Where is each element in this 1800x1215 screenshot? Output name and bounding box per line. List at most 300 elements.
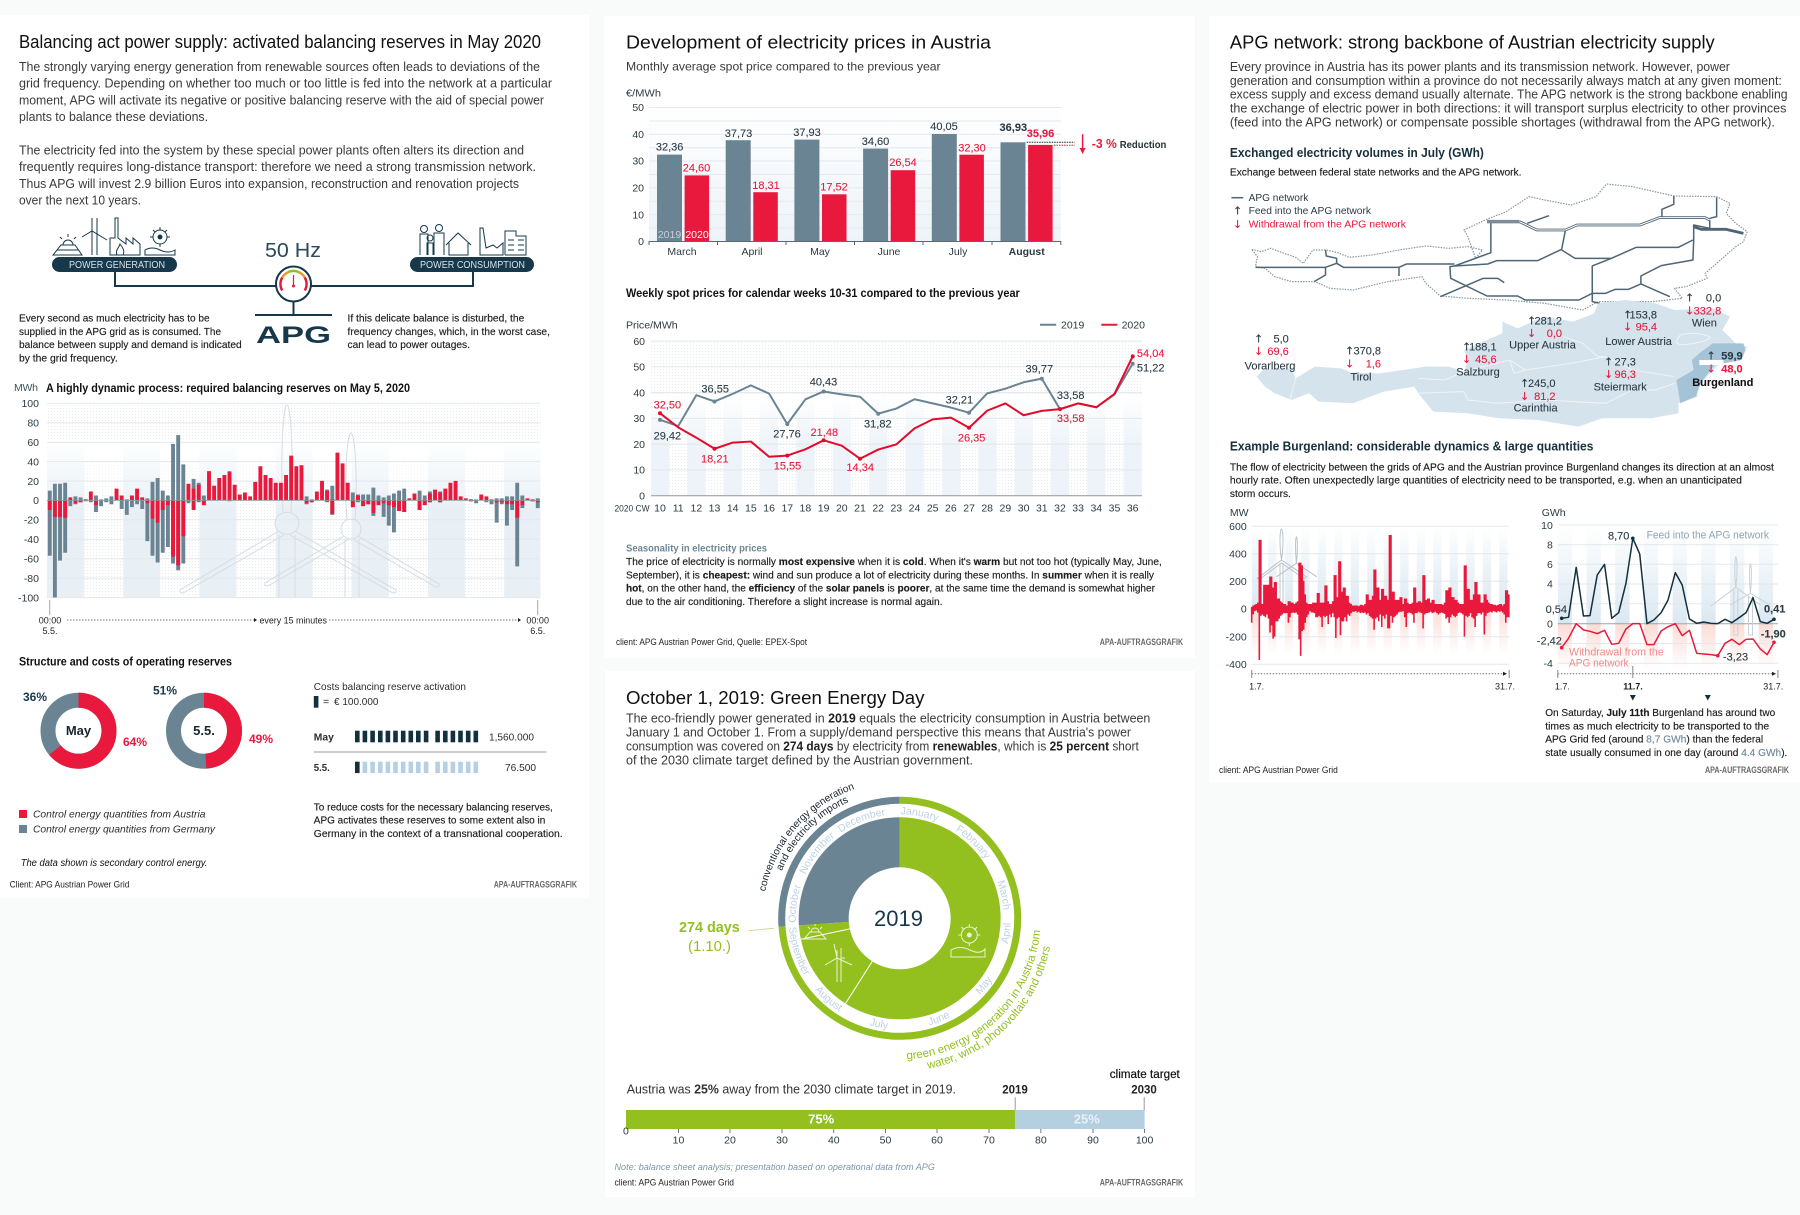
bar chart: monthly spot price: 2020 (685, 229, 709, 241)
y axis labels: -200 (1226, 631, 1247, 643)
data labels 2019: 29,42 (654, 430, 681, 442)
calendar week labels: 33 (1072, 503, 1084, 515)
month labels: September (789, 927, 810, 974)
value labels 2020: 24,60 (683, 162, 710, 174)
map label: Upper Austria: 0,0 (1547, 328, 1562, 340)
y axis labels: 60 (27, 437, 39, 449)
map label: Upper Austria: Upper Austria (1509, 339, 1577, 351)
intro text: (feed into the APG network) or compensate possible shortages (withdrawal from the APG network). (1230, 115, 1775, 129)
curved label: conventional: and electricity imports (778, 798, 848, 870)
map label: Steiermark: ↓ (1604, 368, 1613, 381)
data labels 2020 (654, 348, 1164, 474)
bar chart: climate target: 75% (808, 1112, 835, 1127)
time axis: every 15 minutes (260, 616, 327, 626)
time axis: 1.7. (1249, 682, 1264, 692)
map label: Lower Austria: ↓ (1623, 321, 1632, 334)
data labels (1537, 529, 1786, 669)
map label: Upper Austria: ↑ (1527, 314, 1536, 327)
legend: years (1040, 320, 1145, 332)
map label: Tirol: ↑ (1345, 345, 1354, 358)
month labels: March (667, 246, 697, 258)
intro text: generation and consumption within a province do not necessarily always match at any given moment: (1230, 74, 1782, 88)
note: secondary control energy: The data shown is secondary control energy. (21, 858, 207, 869)
y axis labels: 0 (1547, 618, 1553, 630)
map label: Salzburg: ↑ (1462, 340, 1471, 353)
text: seasonality (626, 543, 1162, 608)
calendar week labels: 30 (1018, 503, 1030, 515)
donut chart: May: May (66, 723, 92, 738)
turbine illustration (1257, 529, 1317, 610)
y axis labels: 30 (633, 413, 645, 425)
curved label: conventional: conventional energy generation (760, 784, 854, 891)
turbine illustration (1711, 557, 1770, 635)
map label: Tirol: ↓ (1345, 357, 1354, 370)
calendar week labels: 24 (909, 503, 920, 515)
intro text (626, 712, 1150, 767)
value labels 2019: 32,36 (656, 142, 683, 154)
map label: Salzburg: Salzburg (1456, 367, 1500, 379)
legend: network: ↓ (1233, 218, 1242, 231)
legend: control energy (19, 808, 216, 836)
map label: Tirol (1345, 345, 1381, 383)
APG logo: APG (256, 322, 331, 349)
heading: dynamic process: A highly dynamic process: required balancing reserves on May 5, 2020 (46, 381, 410, 395)
map label: Steiermark: ↑ (1604, 355, 1613, 368)
month labels: January (900, 807, 939, 822)
bar chart: climate target: 0 (623, 1126, 629, 1138)
intro text (1230, 60, 1788, 129)
y axis labels: 200 (1229, 576, 1247, 588)
heading: dynamic process: MWh (14, 382, 38, 394)
text: climate target gap: Austria was 25% away from the 2030 climate target in 2019. (627, 1082, 956, 1096)
map label: Vorarlberg: ↑ (1254, 332, 1263, 346)
icon: wind (825, 944, 852, 982)
y axis labels: 10 (1541, 520, 1553, 532)
data labels 2020: 26,35 (958, 432, 985, 444)
calendar week labels: 16 (763, 503, 775, 515)
month labels: August (814, 987, 842, 1012)
bar chart: climate target: climate target (1110, 1069, 1181, 1081)
frequency text: 50 Hz (265, 240, 321, 262)
legend: network: Withdrawal from the APG network (1249, 218, 1407, 230)
text: Burgenland intro (1230, 461, 1774, 500)
map label: Lower Austria: 153,8 (1629, 309, 1657, 321)
text: Burgenland intro: storm occurs. (1230, 488, 1291, 500)
bar chart: climate target: 100 (1136, 1134, 1154, 1146)
text: transnational cooperation: APG activates these reserves to some extent also in (314, 815, 545, 827)
bar chart: monthly spot price (632, 102, 1061, 258)
y axis labels: 10 (633, 465, 645, 477)
donut chart: 5.5. (153, 684, 273, 761)
label: power generation: POWER GENERATION (69, 260, 165, 271)
map label: Tirol: 1,6 (1366, 358, 1381, 370)
y axis labels: 400 (1229, 548, 1247, 560)
map label: Carinthia: ↓ (1520, 390, 1529, 403)
data labels 2020: 32,50 (654, 399, 681, 411)
footer: client: client: APG Austrian Power Grid (1219, 765, 1338, 775)
line chart: weekly prices (614, 336, 1164, 515)
data labels 2019: 36,55 (701, 384, 729, 396)
month labels: July (870, 1018, 888, 1030)
bar chart: climate target (623, 1069, 1181, 1146)
calendar week labels: 20 (836, 503, 848, 515)
y axis labels: 60 (633, 336, 645, 348)
axis unit: €/MWh (626, 88, 661, 100)
data labels 2020: 18,21 (701, 453, 729, 465)
value labels 2020: 32,30 (958, 142, 986, 154)
map label: Lower Austria: ↑ (1623, 308, 1632, 321)
heading: exchanged volumes: Exchanged electricity volumes in July (GWh) (1230, 145, 1484, 160)
data labels 2019: 31,82 (864, 418, 892, 430)
calendar week labels: 13 (709, 503, 720, 515)
month labels: October (788, 884, 800, 922)
data labels 2019: 40,43 (810, 377, 837, 389)
value labels 2019: 36,93 (1000, 122, 1027, 134)
map label: Vorarlberg: 69,6 (1267, 346, 1289, 358)
y axis labels: -400 (1226, 659, 1247, 671)
data labels: -2,42 (1537, 636, 1562, 648)
month labels: August (1009, 246, 1045, 258)
calendar week labels: 32 (1054, 503, 1066, 515)
text: seasonality: hot, on the other hand, the efficiency of the solar panels is poorer, at the same time the demand is somewhat higher (626, 583, 1155, 595)
y axis labels: -20 (24, 514, 39, 526)
map label: Upper Austria: 281,2 (1534, 315, 1562, 327)
callout: 274 days: 274 days (679, 919, 740, 936)
calendar week labels: 11 (673, 503, 684, 515)
month labels: June (928, 1013, 950, 1025)
calendar week labels: 23 (890, 503, 902, 515)
icon: power consumption (420, 224, 526, 255)
cost chart: balancing reserve activation: 76.500 (505, 762, 536, 774)
map label: Salzburg (1456, 340, 1500, 379)
month labels: April (1001, 923, 1012, 944)
intro text: Thus APG will invest 2.9 billion Euros into expansion, reconstruction and renovation projects (19, 177, 519, 191)
y axis labels: -60 (24, 553, 39, 565)
y axis labels: 20 (632, 182, 644, 194)
intro text: moment, APG will activate its negative or positive balancing reserve with the aid of special power (19, 93, 544, 107)
map label: Burgenland: Burgenland (1692, 377, 1753, 389)
text: seasonality: The price of electricity is normally most expensive when it is cold. When it's warm but not too hot (typically May, June, (626, 556, 1162, 568)
time axis: 6.5. (530, 626, 545, 636)
calendar week labels: 19 (818, 503, 830, 515)
map: transmission network (1252, 184, 1747, 310)
legend: network (1231, 192, 1407, 231)
intro text: frequently requires long-distance transport: therefore we need a strong transmission network. (19, 160, 536, 174)
y axis labels: -80 (24, 573, 39, 585)
calendar week labels: 35 (1109, 503, 1120, 515)
calendar week labels: 12 (691, 503, 702, 515)
footer: credit: APA-AUFTRAGSGRAFIK (1100, 637, 1183, 647)
curved label: green energy: water, wind, photovoltaic and others (926, 946, 1050, 1068)
y axis labels (18, 398, 39, 604)
calendar week labels: 2020 CW (614, 504, 650, 515)
map label: Steiermark: 96,3 (1614, 369, 1636, 381)
month labels: December (838, 810, 884, 832)
data labels: 8,70 (1608, 531, 1629, 543)
month labels: May (975, 976, 992, 994)
bar chart: balancing reserves (18, 398, 549, 636)
time axis: 31.7. (1763, 682, 1783, 692)
bar chart: climate target: 70 (983, 1134, 995, 1146)
data labels: -3,23 (1723, 652, 1748, 664)
y axis labels (632, 102, 644, 248)
text: balance left (19, 313, 242, 365)
heading: weekly spot prices: Weekly spot prices for calendar weeks 10-31 compared to the previous year (626, 286, 1020, 300)
text: balance left: by the grid frequency. (19, 353, 118, 365)
time axis: 00:00 (526, 616, 549, 626)
callout: -3 % reduction: Reduction (1120, 139, 1166, 151)
time axis: 1.7. (1555, 682, 1570, 692)
map label: Wien: 0,0 (1706, 292, 1721, 304)
text: balance right: can lead to power outages. (348, 339, 470, 351)
intro text: The eco-friendly power generated in 2019 equals the electricity consumption in Austria between (626, 712, 1150, 726)
month labels: July (949, 246, 968, 258)
map label: Lower Austria: 95,4 (1636, 322, 1657, 334)
map label: Upper Austria (1509, 314, 1577, 351)
calendar week labels: 21 (854, 503, 866, 515)
time axis (1249, 670, 1515, 692)
text: balance right: frequency changes, which, in the worst case, (348, 326, 550, 338)
bar chart: climate target: 60 (931, 1134, 943, 1146)
data labels 2019: 51,22 (1137, 362, 1164, 374)
bar chart: climate target: 20 (724, 1134, 736, 1146)
panel: green energy day (614, 688, 1183, 1188)
map label: Vorarlberg (1245, 332, 1295, 373)
donut chart: May: 36% (23, 690, 47, 704)
map label: Steiermark (1594, 355, 1647, 393)
y axis labels: 8 (1547, 540, 1553, 552)
y axis labels: 0 (639, 490, 645, 502)
map: provinces (1257, 300, 1747, 427)
donut chart: 5.5.: 51% (153, 684, 177, 698)
bar chart: climate target: 50 (880, 1134, 891, 1146)
data labels 2020: 54,04 (1137, 348, 1164, 360)
data labels: -1,90 (1761, 628, 1786, 640)
intro text: The electricity fed into the system by these special power plants often alters its direction and (19, 143, 524, 157)
chart: GWh flow (1537, 507, 1786, 700)
month labels (667, 246, 1045, 258)
value labels 2019: 37,93 (793, 127, 821, 139)
value labels 2020: 18,31 (752, 180, 780, 192)
map label: Steiermark: Steiermark (1594, 381, 1647, 393)
heading: example Burgenland: Example Burgenland: considerable dynamics & large quantities (1230, 438, 1593, 454)
calendar week labels: 17 (781, 503, 793, 515)
map label: Carinthia: ↑ (1520, 377, 1529, 390)
y axis labels: 0 (638, 236, 644, 248)
icon: solar (804, 924, 826, 939)
data labels 2019: 32,21 (946, 394, 973, 406)
map label: Burgenland: ↑ (1706, 350, 1716, 363)
time axis: 11.7. (1623, 682, 1643, 692)
y axis labels: -4 (1543, 658, 1553, 670)
time axis (39, 600, 549, 636)
text: Burgenland intro: The flow of electricity between the grids of APG and the Austrian province Burgenland changes its direction at an almost (1230, 461, 1774, 473)
data labels: APG network (1569, 657, 1629, 669)
footer: credit: APA-AUFTRAGSGRAFIK (1100, 1178, 1183, 1188)
outer ring: green (782, 800, 1018, 1036)
label: power consumption (410, 257, 534, 272)
y axis labels: 40 (633, 387, 645, 399)
y axis labels: 40 (27, 456, 39, 468)
intro text: excess supply and excess demand usually alternate. The APG network is the strong backbone enabling (1230, 88, 1788, 102)
chart: GWh flow: GWh (1542, 507, 1566, 519)
title: Balancing act power supply: activated balancing reserves in May 2020 (19, 32, 541, 52)
text: July 11th: APG Grid fed (around 8,7 GWh) than the federal (1545, 734, 1763, 746)
text: seasonality: Seasonality in electricity prices (626, 543, 767, 555)
month labels: February (956, 825, 990, 858)
segment: green energy (799, 817, 1001, 1019)
data labels 2019: 39,77 (1026, 364, 1053, 376)
legend: network: ↑ (1233, 204, 1242, 218)
bar chart: climate target: 2030 (1131, 1084, 1157, 1096)
text: seasonality: September), it is cheapest: wind and sun produce a lot of electricity during these months. In summer when it is really (626, 569, 1155, 581)
donut chart: May: 64% (123, 735, 147, 749)
markers (1630, 695, 1711, 700)
radial chart: 2019 (679, 784, 1050, 1068)
y axis labels: 0 (1241, 604, 1247, 616)
cost chart: balancing reserve activation: € 100.000 (334, 696, 379, 708)
y axis labels: 20 (633, 439, 645, 451)
map label: Salzburg: 45,6 (1475, 354, 1497, 366)
month labels: June (878, 246, 901, 258)
intro text: plants to balance these deviations. (19, 110, 208, 124)
map label: Lower Austria: Lower Austria (1605, 336, 1673, 348)
value labels 2020 (683, 128, 1054, 194)
map label: Tirol: 370,8 (1353, 346, 1381, 358)
month labels: April (741, 246, 763, 258)
map label: Carinthia: 245,0 (1528, 378, 1556, 390)
title: October 1, 2019: Green Energy Day (626, 688, 924, 708)
calendar week labels: 22 (872, 503, 884, 515)
label: power generation (52, 257, 177, 272)
intro text: over the next 10 years. (19, 194, 141, 208)
data labels 2020: 14,34 (846, 462, 874, 474)
title: Development of electricity prices in Austria (626, 32, 992, 52)
callout: -3 % reduction (1027, 134, 1166, 154)
outer ring: conventional (782, 800, 900, 926)
value labels 2019 (656, 121, 1027, 154)
text: seasonality: due to the air conditioning. Therefore a slight increase is normal again. (626, 596, 942, 608)
value labels 2019: 37,73 (725, 128, 752, 140)
chart: MW flow: MW (1230, 507, 1249, 519)
month labels: March (998, 880, 1011, 910)
y axis labels (1226, 521, 1247, 671)
icon: frequency gauge (276, 266, 311, 302)
month labels: November (799, 832, 834, 874)
subtitle: Monthly average spot price compared to the previous year (626, 60, 941, 74)
legend: years: 2020 (1122, 320, 1145, 332)
map label: Burgenland (1692, 350, 1753, 389)
value labels 2020: 35,96 (1027, 128, 1054, 140)
text: balance right (348, 313, 550, 351)
panel: balancing act (0, 15, 589, 898)
month labels: May (810, 246, 831, 258)
map label: Vorarlberg: ↓ (1254, 345, 1263, 358)
data labels 2019 (654, 362, 1164, 442)
y axis labels (633, 336, 645, 502)
panel: electricity prices (604, 16, 1195, 658)
map label: Carinthia: 81,2 (1534, 391, 1556, 403)
icon: hydro (951, 924, 985, 957)
text: July 11th (1545, 707, 1787, 759)
cost chart: balancing reserve activation: 1,560.000 (489, 732, 534, 744)
y axis labels (1541, 520, 1553, 670)
y axis labels: 20 (27, 476, 39, 488)
time axis: 5.5. (42, 626, 58, 636)
map label: Salzburg: 188,1 (1469, 341, 1497, 353)
text: transnational cooperation: Germany in the context of a transnational cooperation. (314, 828, 563, 840)
icon: power generation (53, 218, 175, 255)
center label: 2019 (874, 906, 923, 931)
legend: control energy: Control energy quantities from Germany (33, 824, 216, 836)
calendar week labels (614, 503, 1139, 515)
y axis labels: 100 (21, 398, 39, 410)
intro text: Every province in Austria has its power plants and its transmission network. However, power (1230, 60, 1730, 74)
map label: Carinthia: Carinthia (1514, 403, 1558, 415)
data labels: 0,41 (1764, 603, 1785, 615)
balance connectors (115, 272, 473, 315)
calendar week labels: 27 (963, 503, 975, 515)
callout: 274 days: (1.10.) (688, 938, 731, 955)
map label: Steiermark: 27,3 (1614, 356, 1636, 368)
legend: control energy: Control energy quantities from Austria (33, 808, 206, 820)
month labels (788, 807, 1012, 1030)
bar chart: climate target: 25% (1074, 1112, 1100, 1127)
y axis labels: 80 (27, 417, 39, 429)
y axis labels: 4 (1547, 579, 1553, 591)
axis unit: Price/MWh (626, 320, 678, 332)
intro text: The strongly varying energy generation from renewable sources often leads to deviations of the (19, 60, 540, 74)
turbine illustration (180, 405, 439, 598)
y axis labels: 50 (633, 362, 645, 374)
label: power consumption: POWER CONSUMPTION (420, 260, 525, 271)
map label: Salzburg: ↓ (1462, 353, 1471, 366)
map label: Wien: ↑ (1685, 291, 1694, 304)
donut chart: 5.5.: 49% (249, 732, 273, 746)
y axis labels: 10 (632, 209, 644, 221)
data labels 2020: 15,55 (774, 460, 801, 472)
footer: client: client: APG Austrian Power Grid (614, 1178, 734, 1188)
text: Burgenland intro: hourly rate. Often unexpectedly large quantities of electricity need to be transported, e.g. when an unanticipated (1230, 475, 1742, 487)
calendar week labels: 15 (745, 503, 757, 515)
cost chart: balancing reserve activation: = (323, 696, 329, 708)
time axis (1555, 666, 1783, 692)
map label: Upper Austria: ↓ (1527, 327, 1536, 340)
text: July 11th: On Saturday, July 11th Burgenland has around two (1545, 707, 1775, 719)
y axis labels: 30 (632, 156, 644, 168)
donut chart: 5.5.: 5.5. (193, 723, 215, 738)
y axis labels: 6 (1547, 559, 1553, 571)
calendar week labels: 29 (1000, 503, 1011, 515)
legend: network: Feed into the APG network (1249, 205, 1372, 217)
calendar week labels: 28 (981, 503, 993, 515)
panel: APG network (1209, 16, 1800, 782)
callout: -3 % reduction: -3 % (1092, 136, 1117, 151)
bar chart: climate target: 30 (776, 1134, 788, 1146)
map label: Carinthia (1514, 377, 1558, 415)
map label: Vorarlberg: Vorarlberg (1245, 361, 1295, 373)
data labels 2019: 33,58 (1057, 390, 1084, 402)
subheading: Exchange between federal state networks and the APG network. (1230, 166, 1522, 178)
value labels 2019: 34,60 (862, 136, 889, 148)
text: transnational cooperation: To reduce costs for the necessary balancing reserves, (314, 801, 553, 813)
donut chart: May (23, 690, 147, 761)
intro text: the exchange of electric power in both directions: it will transport surplus electricity to other provinces (1230, 102, 1786, 116)
y axis labels: 40 (632, 129, 644, 141)
bar chart: climate target: 40 (828, 1134, 840, 1146)
curved label: green energy: green energy generation in Austria from (906, 930, 1040, 1062)
callout: 274 days (679, 919, 774, 955)
